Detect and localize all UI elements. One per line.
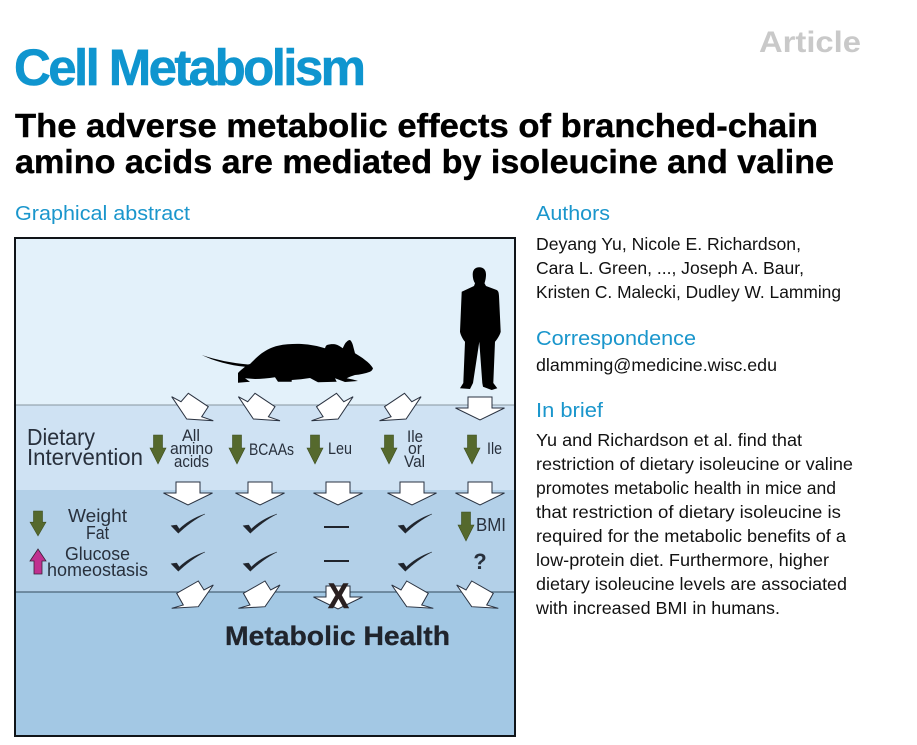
- in brief: dietary isoleucine levels are associated: [536, 574, 847, 594]
- label: weight and fat: [30, 505, 127, 543]
- authors: Deyang Yu, Nicole E. Richardson,: [536, 234, 801, 254]
- label: metabolic health: Metabolic Health: [225, 621, 450, 651]
- panel: graphical abstract: [15, 238, 515, 736]
- in brief: with increased BMI in humans.: [535, 598, 780, 618]
- label: weight and fat: Weight: [68, 505, 127, 526]
- paper title: [15, 108, 834, 181]
- diet column: Ile or Val: Ile: [407, 427, 423, 446]
- in brief: required for the metabolic benefits of a: [536, 526, 846, 546]
- article type label: Article: [759, 26, 861, 59]
- correspondence: dlamming@medicine.wisc.edu: [536, 355, 777, 375]
- diet column: BCAAs: [229, 435, 294, 464]
- diet column: Leu: Leu: [328, 439, 352, 458]
- in brief: promotes metabolic health in mice and: [536, 478, 836, 498]
- arrows: top row to diet: [172, 393, 504, 421]
- unknown result: ?: [473, 549, 487, 574]
- check marks: glucose: [171, 552, 432, 571]
- diet column: all amino acids: amino: [170, 439, 213, 458]
- label: weight and fat: Fat: [86, 522, 109, 543]
- BMI result: [458, 512, 506, 541]
- diet column: all amino acids: acids: [174, 452, 209, 471]
- diet column: all amino acids: All: [182, 426, 200, 445]
- paper title: amino acids are mediated by isoleucine and valine: [15, 144, 834, 181]
- blocked marker: X: [328, 577, 350, 616]
- diet column: Ile or Val: [381, 427, 425, 471]
- authors: Kristen C. Malecki, Dudley W. Lamming: [536, 282, 841, 302]
- journal name: Cell Metabolism: [14, 39, 366, 96]
- diet column: Leu: [307, 435, 352, 464]
- diet column: Ile or Val: or: [408, 439, 422, 458]
- in brief: [535, 400, 853, 618]
- background bands: [15, 238, 515, 736]
- label: glucose homeostasis: [30, 543, 148, 580]
- check marks: weight and fat: [171, 514, 432, 533]
- in brief: that restriction of dietary isoleucine is: [536, 502, 841, 522]
- BMI result: BMI: [476, 514, 506, 535]
- in brief: In brief: [536, 400, 603, 422]
- icon: human silhouette: [460, 267, 501, 390]
- label: glucose homeostasis: Glucose: [65, 543, 130, 564]
- panel border: [15, 238, 515, 736]
- in brief: Yu and Richardson et al. find that: [536, 430, 802, 450]
- label: glucose homeostasis: homeostasis: [47, 559, 148, 580]
- diet column: Ile or Val: Val: [404, 452, 425, 471]
- diet column: all amino acids: [150, 426, 213, 471]
- authors: Authors: [536, 203, 610, 225]
- no effect dashes: [324, 526, 349, 562]
- authors: Cara L. Green, ..., Joseph A. Baur,: [536, 258, 804, 278]
- correspondence: [536, 328, 777, 375]
- label: dietary intervention: Dietary: [27, 424, 95, 450]
- arrows: bottom row to metabolic health: [172, 581, 498, 609]
- arrows: middle row: [164, 482, 504, 505]
- graphical abstract heading: Graphical abstract: [15, 203, 190, 225]
- correspondence: Correspondence: [536, 328, 696, 350]
- label: dietary intervention: Intervention: [27, 444, 143, 470]
- diet column: Ile in humans: Ile: [487, 439, 502, 458]
- paper title: The adverse metabolic effects of branched-chain: [15, 108, 818, 145]
- diet column: BCAAs: BCAAs: [249, 440, 294, 459]
- icon: mouse silhouette: [202, 340, 373, 383]
- authors: [536, 203, 841, 302]
- diet column: Ile in humans: [464, 435, 502, 464]
- in brief: low-protein diet. Furthermore, higher: [536, 550, 829, 570]
- label: dietary intervention: [27, 424, 143, 470]
- in brief: restriction of dietary isoleucine or valine: [536, 454, 853, 474]
